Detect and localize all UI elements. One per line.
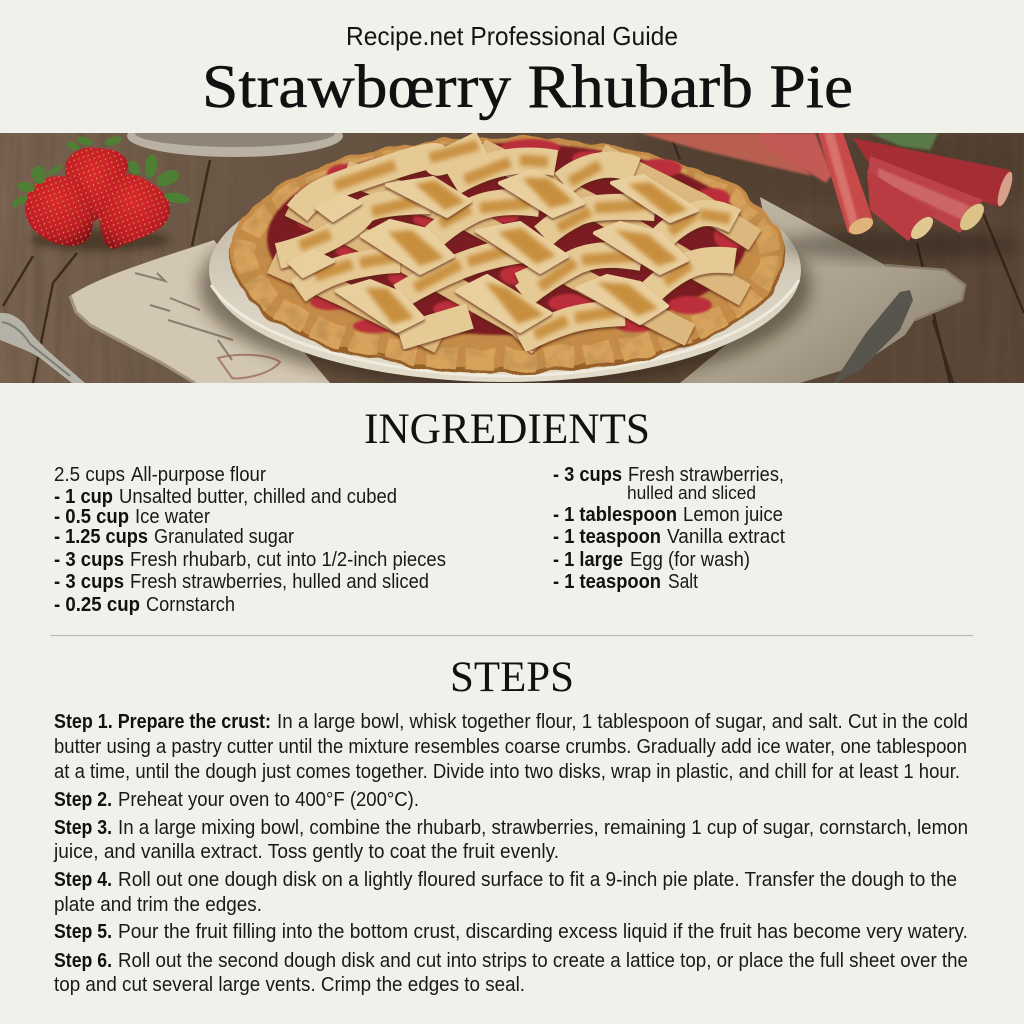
ingredients list: left column: - 1.25 cups (54, 525, 148, 548)
ingredients list: right column: - 1 tablespoon (553, 503, 677, 526)
ingredients list: left column: Unsalted butter, chilled and cubed (119, 485, 397, 508)
step 3: Step 3. (54, 816, 112, 839)
ingredients list: left column: Ice water (135, 505, 210, 528)
hero photo: lattice pie on a wooden table (0, 115, 1024, 390)
step 6: top and cut several large vents. Crimp the edges to seal. (54, 973, 525, 996)
step 6: Step 6. (54, 949, 112, 972)
ingredients list: left column: Granulated sugar (154, 525, 294, 548)
step 3: In a large mixing bowl, combine the rhubarb, strawberries, remaining 1 cup of sugar, cornstarch, lemon (118, 816, 968, 839)
pie plate (189, 220, 820, 383)
title: Strawbœrry Rhubarb Pie (202, 54, 853, 121)
back strawberry (65, 135, 128, 222)
lattice: wavy strips (278, 143, 735, 341)
step 5: Pour the fruit filling into the bottom crust, discarding excess liquid if the fruit has become very watery. (118, 920, 968, 943)
step 5: Step 5. (54, 920, 112, 943)
knife (832, 290, 913, 385)
ingredients list: left column: - 1 cup (54, 485, 113, 508)
ingredients list: right column: hulled and sliced (627, 482, 756, 503)
ingredients list: left column: Cornstarch (146, 593, 235, 616)
ingredients list: right column: Vanilla extract (667, 525, 785, 548)
ingredients list: right column: Salt (668, 570, 698, 593)
step 1 (54, 710, 968, 783)
subtitle: Recipe.net Professional Guide (346, 21, 678, 51)
step 3: juice, and vanilla extract. Toss gently to coat the fruit evenly. (53, 840, 559, 863)
strawberries (10, 135, 191, 251)
ingredients list: left column: - 3 cups (54, 548, 124, 571)
step 4: plate and trim the edges. (54, 893, 262, 916)
step 3 (53, 816, 968, 863)
step 1: Step 1. Prepare the crust: (54, 710, 271, 733)
wooden table (0, 133, 1024, 383)
ingredients list: right column: Fresh strawberries, (628, 463, 784, 486)
ingredients list: left column: Fresh strawberries, hulled and sliced (130, 570, 429, 593)
step 2: Step 2. (54, 788, 112, 811)
ingredients list: right column: - 3 cups (553, 463, 622, 486)
lattice: crossing strips (290, 171, 697, 331)
fruit filling (267, 139, 747, 335)
ingredients list: left column: All-purpose flour (131, 463, 266, 486)
step 2: Preheat your oven to 400°F (200°C). (118, 788, 419, 811)
ingredients list: left column: - 0.5 cup (54, 505, 129, 528)
background plates (127, 133, 343, 157)
left strawberry (10, 163, 93, 246)
crust mottling (234, 138, 780, 370)
step 4: Step 4. (54, 868, 112, 891)
step 6: Roll out the second dough disk and cut into strips to create a lattice top, or place the full sheet over the (118, 949, 968, 972)
ingredients list: right column: - 1 large (553, 548, 623, 571)
step 6 (54, 949, 968, 996)
ingredients list: left column: Fresh rhubarb, cut into 1/2-inch pieces (130, 548, 446, 571)
steps heading: STEPS (450, 654, 574, 701)
pie crust (229, 137, 785, 374)
steps list (53, 710, 968, 996)
ingredients list: right column (553, 463, 785, 593)
right strawberry (100, 153, 191, 249)
ingredients list: right column: - 1 teaspoon (553, 525, 661, 548)
ingredients list: left column: - 3 cups (54, 570, 124, 593)
ingredients heading: INGREDIENTS (364, 406, 650, 453)
ingredients list: right column: Lemon juice (683, 503, 783, 526)
ingredients list: left column: - 0.25 cup (54, 593, 140, 616)
lattice: under strips (272, 150, 755, 345)
ingredients list: left column (54, 463, 446, 616)
ingredients list: left column: 2.5 cups (54, 463, 125, 486)
linen napkin (70, 197, 965, 383)
napkin: right part (680, 197, 965, 383)
napkin: left part (70, 240, 330, 383)
rhubarb stalks (640, 133, 1020, 259)
ingredients list: right column: - 1 teaspoon (553, 570, 661, 593)
fork (0, 313, 85, 383)
step 4 (54, 868, 957, 916)
step 4: Roll out one dough disk on a lightly floured surface to fit a 9-inch pie plate. Transfer the dough to the (118, 868, 957, 891)
step 1: In a large bowl, whisk together flour, 1 tablespoon of sugar, and salt. Cut in the cold (277, 710, 968, 733)
ingredients list: right column: Egg (for wash) (630, 548, 750, 571)
